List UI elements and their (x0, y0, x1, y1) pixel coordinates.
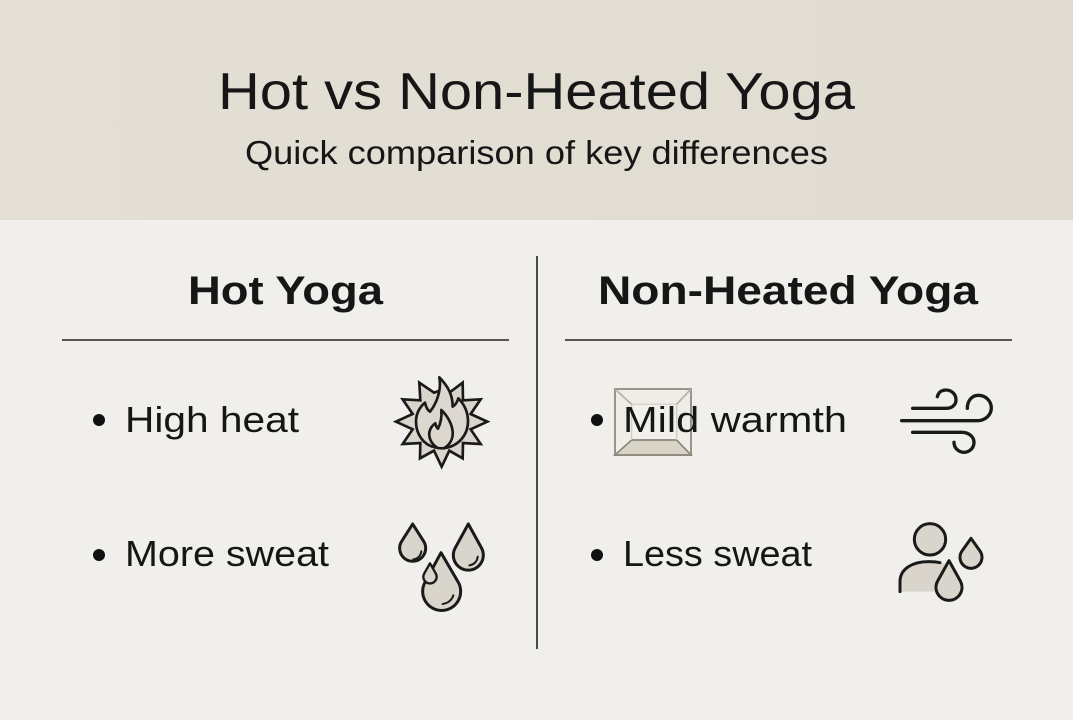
subtitle: Quick comparison of key differences (245, 134, 828, 171)
panel: non-heated yoga (565, 269, 1012, 600)
center divider (536, 256, 538, 649)
icon: beveled frame placeholder (615, 389, 691, 455)
icon: flame in sun (396, 377, 487, 467)
item: more sweat: More sweat (125, 533, 329, 574)
panel: hot yoga (62, 269, 509, 610)
heading: hot yoga: Hot Yoga (188, 269, 384, 313)
item: high heat: High heat (125, 399, 299, 440)
icon: wind (902, 390, 991, 452)
header band (0, 0, 1073, 220)
item: mild warmth: Mild warmth (623, 399, 847, 440)
icon: sweat drops (400, 524, 483, 610)
title: Hot vs Non-Heated Yoga (218, 63, 855, 121)
heading: non-heated yoga: Non-Heated Yoga (598, 269, 979, 313)
icon: person with sweat drops (900, 524, 982, 600)
item: less sweat: Less sweat (623, 533, 812, 574)
